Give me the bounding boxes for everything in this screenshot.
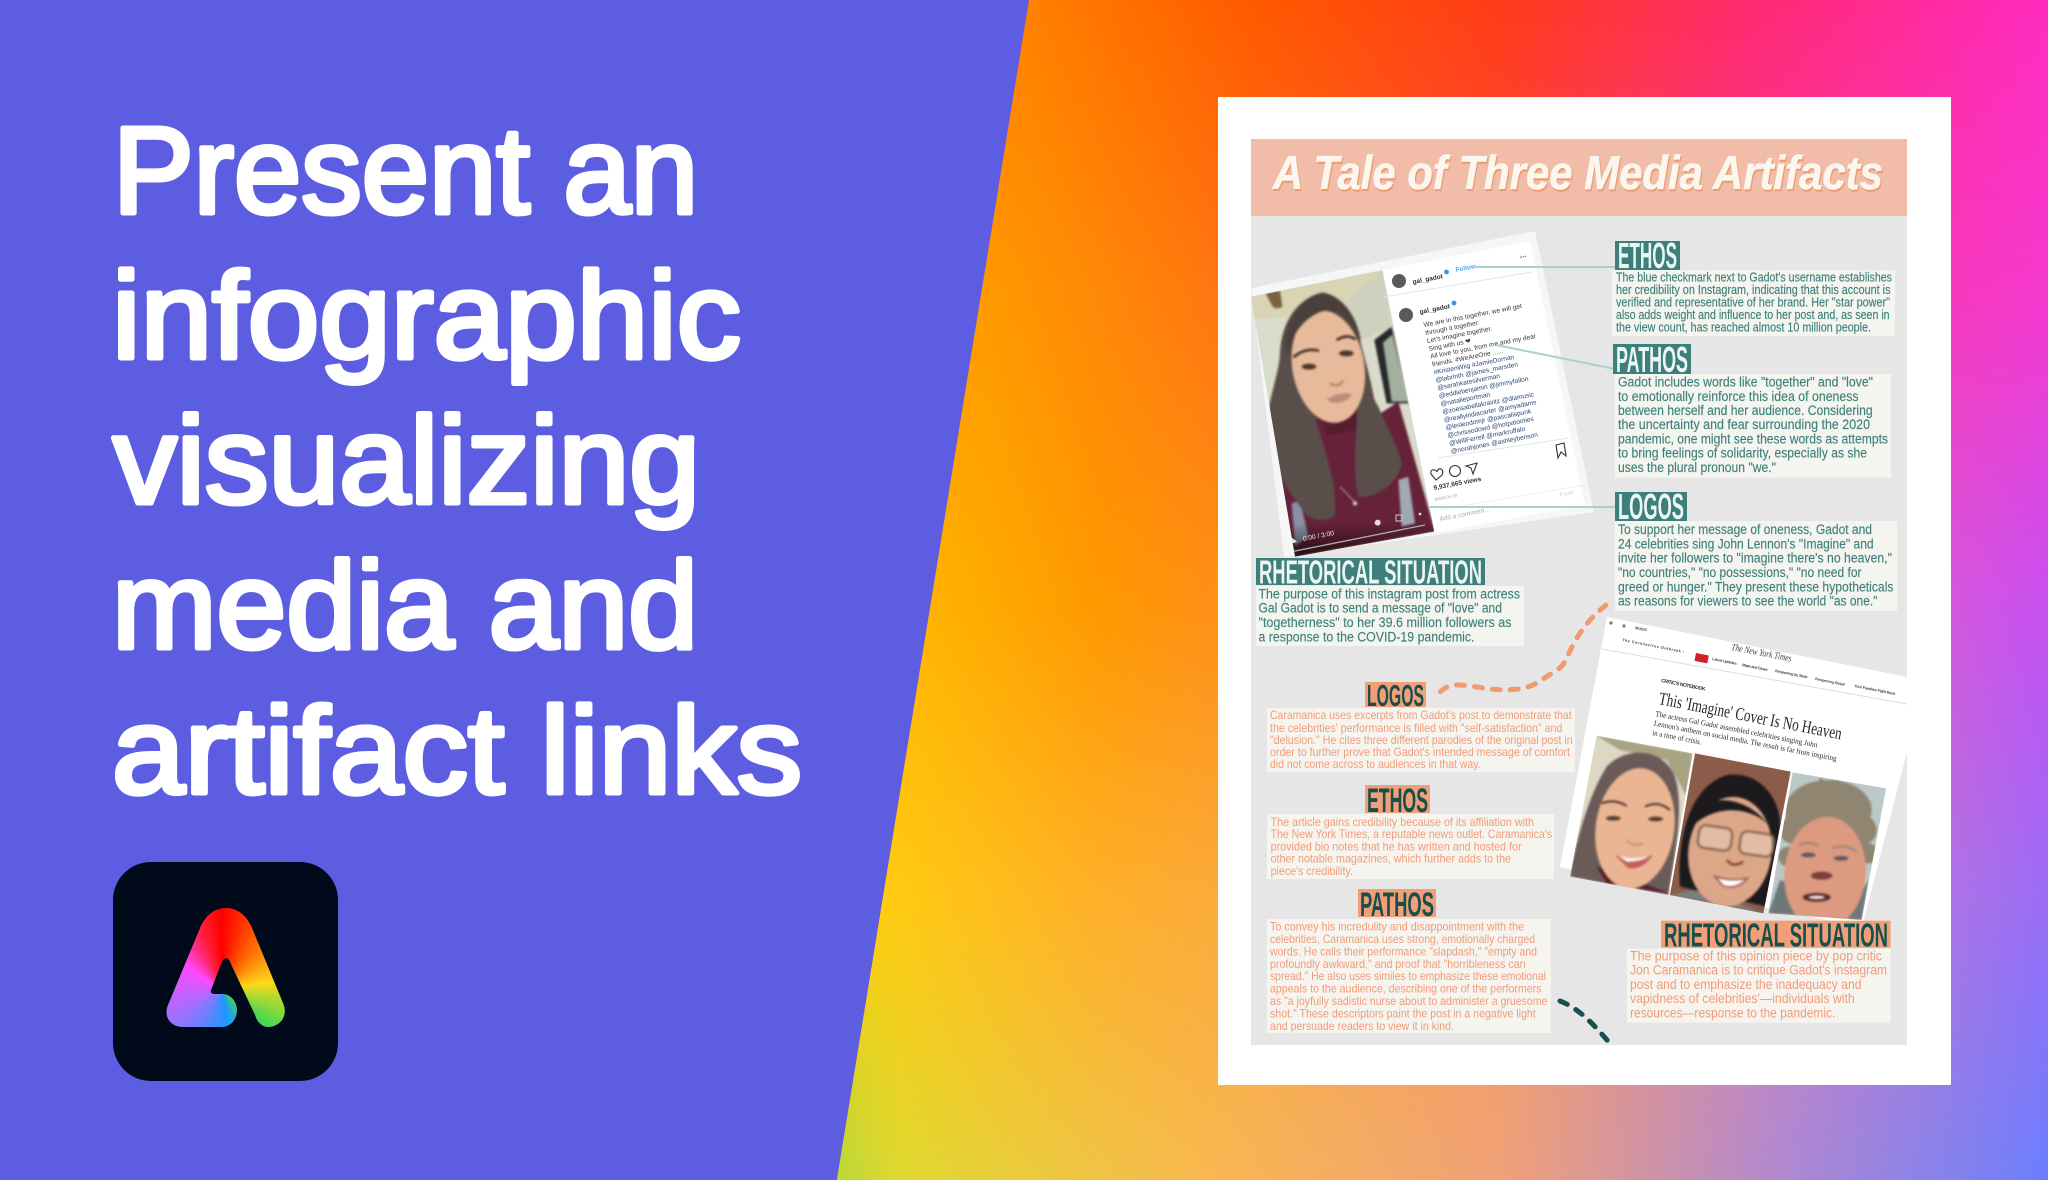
article navigation: Your Families Fight Back [1854, 684, 1897, 696]
photo: Gal Gadot smiling [1570, 736, 1692, 895]
post caption: All love to you, from me and my dear [1430, 333, 1537, 360]
instagram post screenshot [1245, 231, 1594, 560]
RHETORICAL SITUATION callout (article): The purpose of this opinion piece by pop critic [1630, 948, 1882, 964]
main title: Present an [113, 103, 698, 240]
PATHOS callout (article): appeals to the audience, describing one of the performers [1270, 982, 1542, 996]
PATHOS callout (article): and persuade readers to view it in kind. [1270, 1019, 1454, 1033]
LOGOS callout (article): the celebrities' performance is filled with "self-satisfaction" and [1270, 721, 1562, 735]
article navigation: MUSIC [1635, 626, 1648, 632]
article headline: Lennon's anthem on social media. The result is far from inspiring [1653, 719, 1838, 763]
LOGOS callout (instagram): greed or hunger." They present these hypotheticals [1618, 580, 1894, 594]
article navigation: The New York Times [1730, 642, 1792, 665]
RHETORICAL SITUATION callout (instagram): a response to the COVID-19 pandemic. [1258, 630, 1474, 644]
post caption: We are in this together, we will get [1423, 303, 1523, 329]
ETHOS callout (instagram): also adds weight and influence to her post and, as seen in [1616, 308, 1890, 322]
article headline: in a time of crisis. [1652, 728, 1702, 747]
main title: media and [112, 538, 698, 675]
ETHOS callout (article): The New York Times, a reputable news outlet. Caramanica's [1271, 827, 1552, 841]
gradient background panel [837, 0, 2048, 1180]
post caption: Let's imagine together. [1426, 325, 1493, 345]
article headline: The actress Gal Gadot assembled celebrities singing John [1655, 709, 1818, 749]
LOGOS callout (instagram): 24 celebrities sing John Lennon's "Imagine" and [1618, 536, 1874, 552]
article headline: CRITIC'S NOTEBOOK [1661, 678, 1706, 693]
post caption: @norahjones @ashleybenson [1450, 432, 1539, 455]
ETHOS callout (instagram): ETHOS [1618, 235, 1677, 276]
main title: visualizing [113, 393, 700, 530]
LOGOS callout (instagram) [1615, 486, 1897, 611]
PATHOS callout (instagram): PATHOS [1616, 339, 1688, 380]
LOGOS callout (instagram): To support her message of oneness, Gadot and [1618, 522, 1872, 537]
PATHOS callout (article): celebrities, Caramanica uses strong, emotionally charged [1270, 932, 1535, 946]
post caption: @chrissodowd @hotpatooties [1447, 416, 1535, 439]
post account header: Follow [1455, 263, 1478, 274]
post caption: Sing with us ❤ [1428, 338, 1472, 353]
photo: Sarah Silverman with glasses [1670, 754, 1791, 914]
post caption: @natalieportman [1440, 391, 1491, 408]
ETHOS callout (instagram) [1612, 235, 1895, 336]
PATHOS callout (instagram): to emotionally reinforce this idea of oneness [1618, 389, 1859, 404]
LOGOS callout (instagram): "no countries," "no possessions," "no need for [1618, 565, 1862, 580]
article navigation: Reopening by State [1775, 669, 1808, 679]
arrow: orange dashed connector [1438, 605, 1606, 694]
LOGOS callout (article): LOGOS [1367, 678, 1424, 713]
RHETORICAL SITUATION callout (article): Jon Caramanica is to critique Gadot's instagram [1630, 962, 1887, 978]
RHETORICAL SITUATION callout (instagram): Gal Gadot is to send a message of "love" and [1258, 600, 1502, 616]
LOGOS callout (article): order to further prove that Gadot's intended message of comfort [1270, 745, 1571, 759]
ETHOS callout (instagram): her credibility on Instagram, indicating that this account is [1616, 283, 1890, 297]
post actions and view count: MARCH 18 [1434, 493, 1458, 502]
poster header band [1251, 139, 1907, 216]
PATHOS callout (article): spread." He also uses similes to emphasize these emotional [1270, 969, 1546, 983]
RHETORICAL SITUATION callout (article): vapidness of celebrities'—individuals with [1630, 991, 1855, 1006]
post actions and view count: Post [1559, 489, 1575, 499]
ETHOS callout (article) [1267, 782, 1554, 879]
RHETORICAL SITUATION callout (instagram): "togetherness" to her 39.6 million followers as [1258, 615, 1512, 630]
post account header [1384, 250, 1532, 322]
poster title: A Tale of Three Media Artifacts [1272, 146, 1883, 199]
post caption: @sarahkatesilverman [1437, 373, 1501, 392]
New York Times article screenshot [1560, 617, 1907, 933]
post caption: through it together. [1425, 320, 1480, 337]
PATHOS callout (article): PATHOS [1360, 886, 1434, 924]
article headline [1652, 678, 1844, 763]
LOGOS callout (article): "delusion." He cites three different parodies of the original post in [1270, 733, 1573, 747]
post caption: #KristenWiig #JamieDornan [1433, 354, 1515, 376]
main title [112, 103, 802, 820]
icon: Adobe Express app logo [113, 862, 338, 1081]
arrow: dark teal dashed connector [1560, 1001, 1612, 1046]
post account header: gal_gadot [1419, 303, 1451, 316]
post actions and view count: 9,937,665 views [1433, 476, 1482, 492]
PATHOS callout (article): To convey his incredulity and disappointment with the [1270, 920, 1524, 934]
article navigation: Reopening Retail [1815, 677, 1845, 687]
ETHOS callout (article): The article gains credibility because of its affiliation with [1271, 815, 1534, 829]
post caption: @labrinth @james_marsden [1435, 361, 1519, 384]
post caption: friends. #WeAreOne ...... [1432, 348, 1504, 368]
RHETORICAL SITUATION callout (instagram): RHETORICAL SITUATION [1259, 554, 1482, 590]
ETHOS callout (article): other notable magazines, which further adds to the [1271, 852, 1511, 866]
RHETORICAL SITUATION callout (instagram) [1256, 554, 1524, 646]
main title: artifact links [112, 683, 802, 820]
ETHOS callout (instagram): verified and representative of her brand. Her "star power" [1616, 296, 1890, 310]
PATHOS callout (instagram): Gadot includes words like "together" and "love" [1618, 374, 1873, 390]
RHETORICAL SITUATION callout (article): resources—response to the pandemic. [1630, 1006, 1835, 1020]
main title: infographic [112, 248, 741, 385]
ETHOS callout (article): provided bio notes that he has written and hosted for [1271, 839, 1522, 853]
ETHOS callout (article): piece's credibility. [1271, 864, 1353, 878]
RHETORICAL SITUATION callout (instagram): The purpose of this instagram post from actress [1258, 586, 1520, 602]
PATHOS callout (instagram) [1613, 339, 1891, 478]
PATHOS callout (instagram): between herself and her audience. Considering [1618, 403, 1873, 418]
ETHOS callout (instagram): The blue checkmark next to Gadot's username establishes [1616, 270, 1892, 284]
article photos of three celebrities [1570, 736, 1886, 920]
RHETORICAL SITUATION callout (article): post and to emphasize the inadequacy and [1630, 977, 1862, 992]
photo: Will Ferrell with wild hair [1768, 772, 1886, 920]
post actions and view count [1431, 438, 1585, 523]
video frame of Gal Gadot: 0:00 / 3:00 [1302, 530, 1335, 543]
post caption: @lesleodomjr @pascalispunk [1445, 408, 1533, 432]
PATHOS callout (instagram): uses the plural pronoun "we." [1618, 460, 1776, 475]
ETHOS callout (article): ETHOS [1367, 782, 1428, 820]
post caption [1423, 303, 1539, 455]
LOGOS callout (instagram): as reasons for viewers to see the world "as one." [1618, 594, 1878, 608]
white poster card [1218, 97, 1951, 1085]
ETHOS callout (instagram): the view count, has reached almost 10 million people. [1616, 320, 1871, 334]
RHETORICAL SITUATION callout (article) [1627, 916, 1891, 1023]
article navigation: Latest Updates [1712, 657, 1737, 666]
post caption: @WillFerrell @markruffalo [1449, 426, 1526, 447]
PATHOS callout (article): as "a joyfully sadistic nurse about to administer a gruesome [1270, 994, 1548, 1008]
LOGOS callout (article) [1267, 678, 1575, 772]
PATHOS callout (instagram): to bring feelings of solidarity, especially as she [1618, 446, 1867, 460]
PATHOS callout (article): profoundly awkward," and proof that "horribleness can [1270, 957, 1526, 971]
video frame of Gal Gadot [1251, 270, 1434, 557]
poster panel [1245, 139, 1907, 1046]
connector lines to teal labels [1430, 267, 1615, 507]
post caption: @reallyindiacarter @amyadams [1443, 399, 1538, 424]
PATHOS callout (article): words. He calls their performance "slapdash," "empty and [1269, 944, 1537, 958]
post actions and view count: Add a comment... [1439, 506, 1491, 523]
article navigation: Maps and Cases [1742, 663, 1768, 672]
PATHOS callout (instagram): pandemic, one might see these words as attempts [1618, 432, 1888, 446]
article headline: This 'Imagine' Cover Is No Heaven [1657, 688, 1844, 743]
article navigation [1609, 621, 1897, 696]
article navigation: The Coronavirus Outbreak › [1622, 638, 1685, 654]
LOGOS callout (instagram): LOGOS [1618, 486, 1684, 527]
post account header: ... [1519, 250, 1527, 260]
post account header: gal_gadot [1412, 273, 1444, 286]
PATHOS callout (instagram): the uncertainty and fear surrounding the 2020 [1618, 417, 1870, 432]
post caption: @eddiebenjamin @jimmyfallon [1438, 376, 1529, 400]
LOGOS callout (instagram): invite her followers to "imagine there's no heaven," [1618, 550, 1892, 566]
LOGOS callout (article): did not come across to audiences in that way. [1270, 757, 1480, 771]
post caption: @zoeisabellakravitz @dlamusic [1442, 391, 1535, 416]
LOGOS callout (article): Caramanica uses excerpts from Gadot's post to demonstrate that [1270, 708, 1572, 722]
PATHOS callout (article): shot." These descriptors paint the post in a negative light [1270, 1006, 1536, 1020]
PATHOS callout (article) [1267, 886, 1551, 1033]
